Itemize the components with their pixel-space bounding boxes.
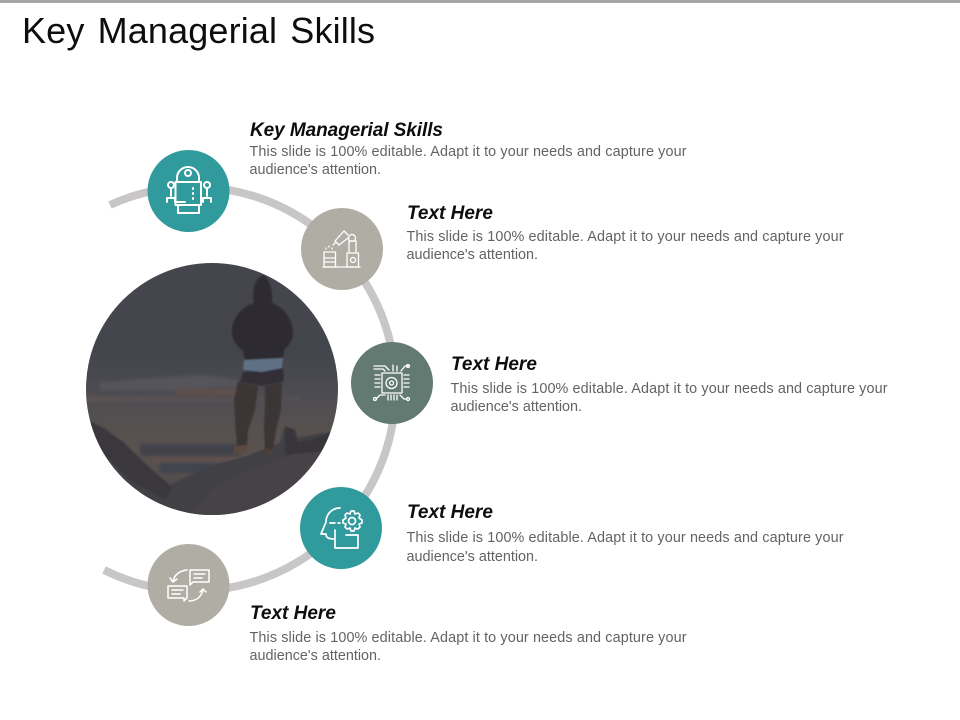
- text block 1: This slide is 100% editable. Adapt it to your needs and capture your: [250, 144, 687, 160]
- text block 2: This slide is 100% editable. Adapt it to your needs and capture your: [406, 229, 844, 245]
- text block 4: audience's attention.: [406, 549, 538, 565]
- node 2: grey robot arm icon: [301, 208, 383, 290]
- node 4: teal mind gear icon: [300, 487, 382, 569]
- text block 2: [406, 203, 844, 263]
- icon: head with gear: [321, 508, 362, 548]
- node 5: grey conversation icon: [148, 544, 230, 626]
- title: Key Managerial Skills: [22, 10, 375, 51]
- water and rocks: [140, 444, 240, 473]
- text block 1: audience's attention.: [250, 162, 381, 178]
- text block 1: Key Managerial Skills: [250, 120, 443, 141]
- text block 3: Text Here: [451, 354, 537, 375]
- node 3: slate circuit icon: [351, 342, 433, 424]
- icon: chat bubbles with arrows: [168, 570, 209, 601]
- photo: hooded person on rocks at dusk: [86, 263, 340, 520]
- text block 2: audience's attention.: [406, 247, 538, 263]
- text block 3: [450, 354, 888, 415]
- text block 4: [406, 502, 844, 565]
- text block 3: This slide is 100% editable. Adapt it to your needs and capture your: [450, 381, 888, 397]
- curved connector arc: [104, 187, 396, 591]
- icon: robot: [167, 167, 211, 213]
- text block 1: [250, 120, 687, 178]
- text block 4: Text Here: [407, 502, 493, 523]
- text block 2: Text Here: [407, 203, 493, 224]
- text block 5: Text Here: [250, 603, 336, 624]
- text block 3: audience's attention.: [450, 399, 582, 415]
- top border line: [0, 0, 960, 3]
- text block 5: This slide is 100% editable. Adapt it to your needs and capture your: [250, 630, 687, 646]
- text block 4: This slide is 100% editable. Adapt it to your needs and capture your: [406, 530, 844, 546]
- text block 5: audience's attention.: [250, 648, 381, 664]
- icon: processor chip: [374, 364, 410, 400]
- person: [232, 275, 293, 455]
- icon: robotic arm: [323, 231, 360, 267]
- clouds: [86, 375, 237, 403]
- text block 5: [250, 603, 687, 664]
- node 1: teal robot icon: [148, 150, 230, 232]
